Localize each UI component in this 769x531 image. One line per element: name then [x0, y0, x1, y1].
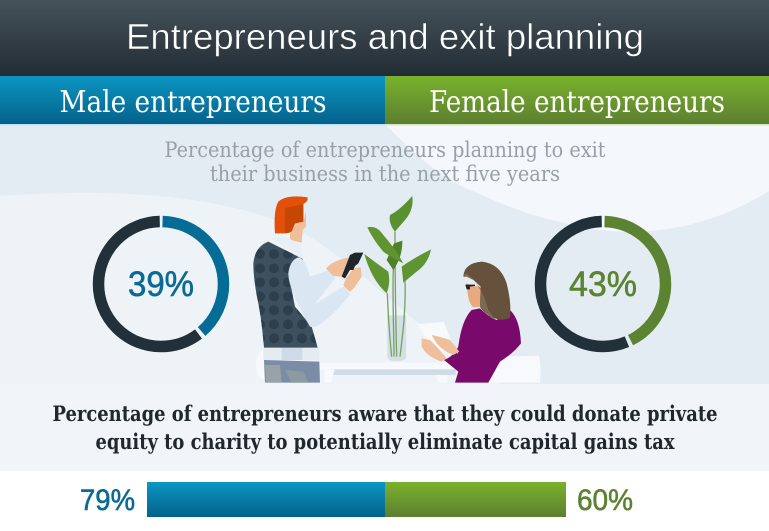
text: exit planning question [164, 138, 606, 186]
label: male 79%: 79% [80, 484, 135, 517]
panel: illustrated background [0, 124, 769, 384]
label: female 60%: 60% [577, 484, 633, 517]
header: male entrepreneurs [0, 76, 385, 124]
donut chart: female 43%: 43% [569, 265, 637, 304]
text: exit planning question: their business in the next five years [210, 162, 560, 186]
illustration: plant in vase [364, 196, 431, 362]
donut chart: female 43% [540, 222, 666, 346]
illustration: man with phone [253, 196, 363, 383]
bar chart: awareness comparison [80, 482, 633, 517]
text: exit planning question: Percentage of entrepreneurs planning to exit [164, 138, 606, 162]
donut chart: male 39%: 39% [128, 265, 194, 304]
header: female entrepreneurs [385, 76, 769, 124]
male bar [147, 482, 385, 517]
donut chart: male 39% [98, 222, 224, 346]
header: male entrepreneurs: Male entrepreneurs [60, 85, 326, 120]
illustration: woman with tablet [418, 262, 541, 383]
header: female entrepreneurs: Female entrepreneurs [429, 85, 725, 120]
female bar [385, 482, 566, 517]
panel: awareness question: equity to charity to potentially eliminate capital gains tax [96, 429, 675, 454]
title banner: Entrepreneurs and exit planning [126, 16, 644, 57]
title banner [0, 0, 769, 76]
illustration: table [256, 348, 456, 383]
panel: awareness question [0, 384, 769, 471]
